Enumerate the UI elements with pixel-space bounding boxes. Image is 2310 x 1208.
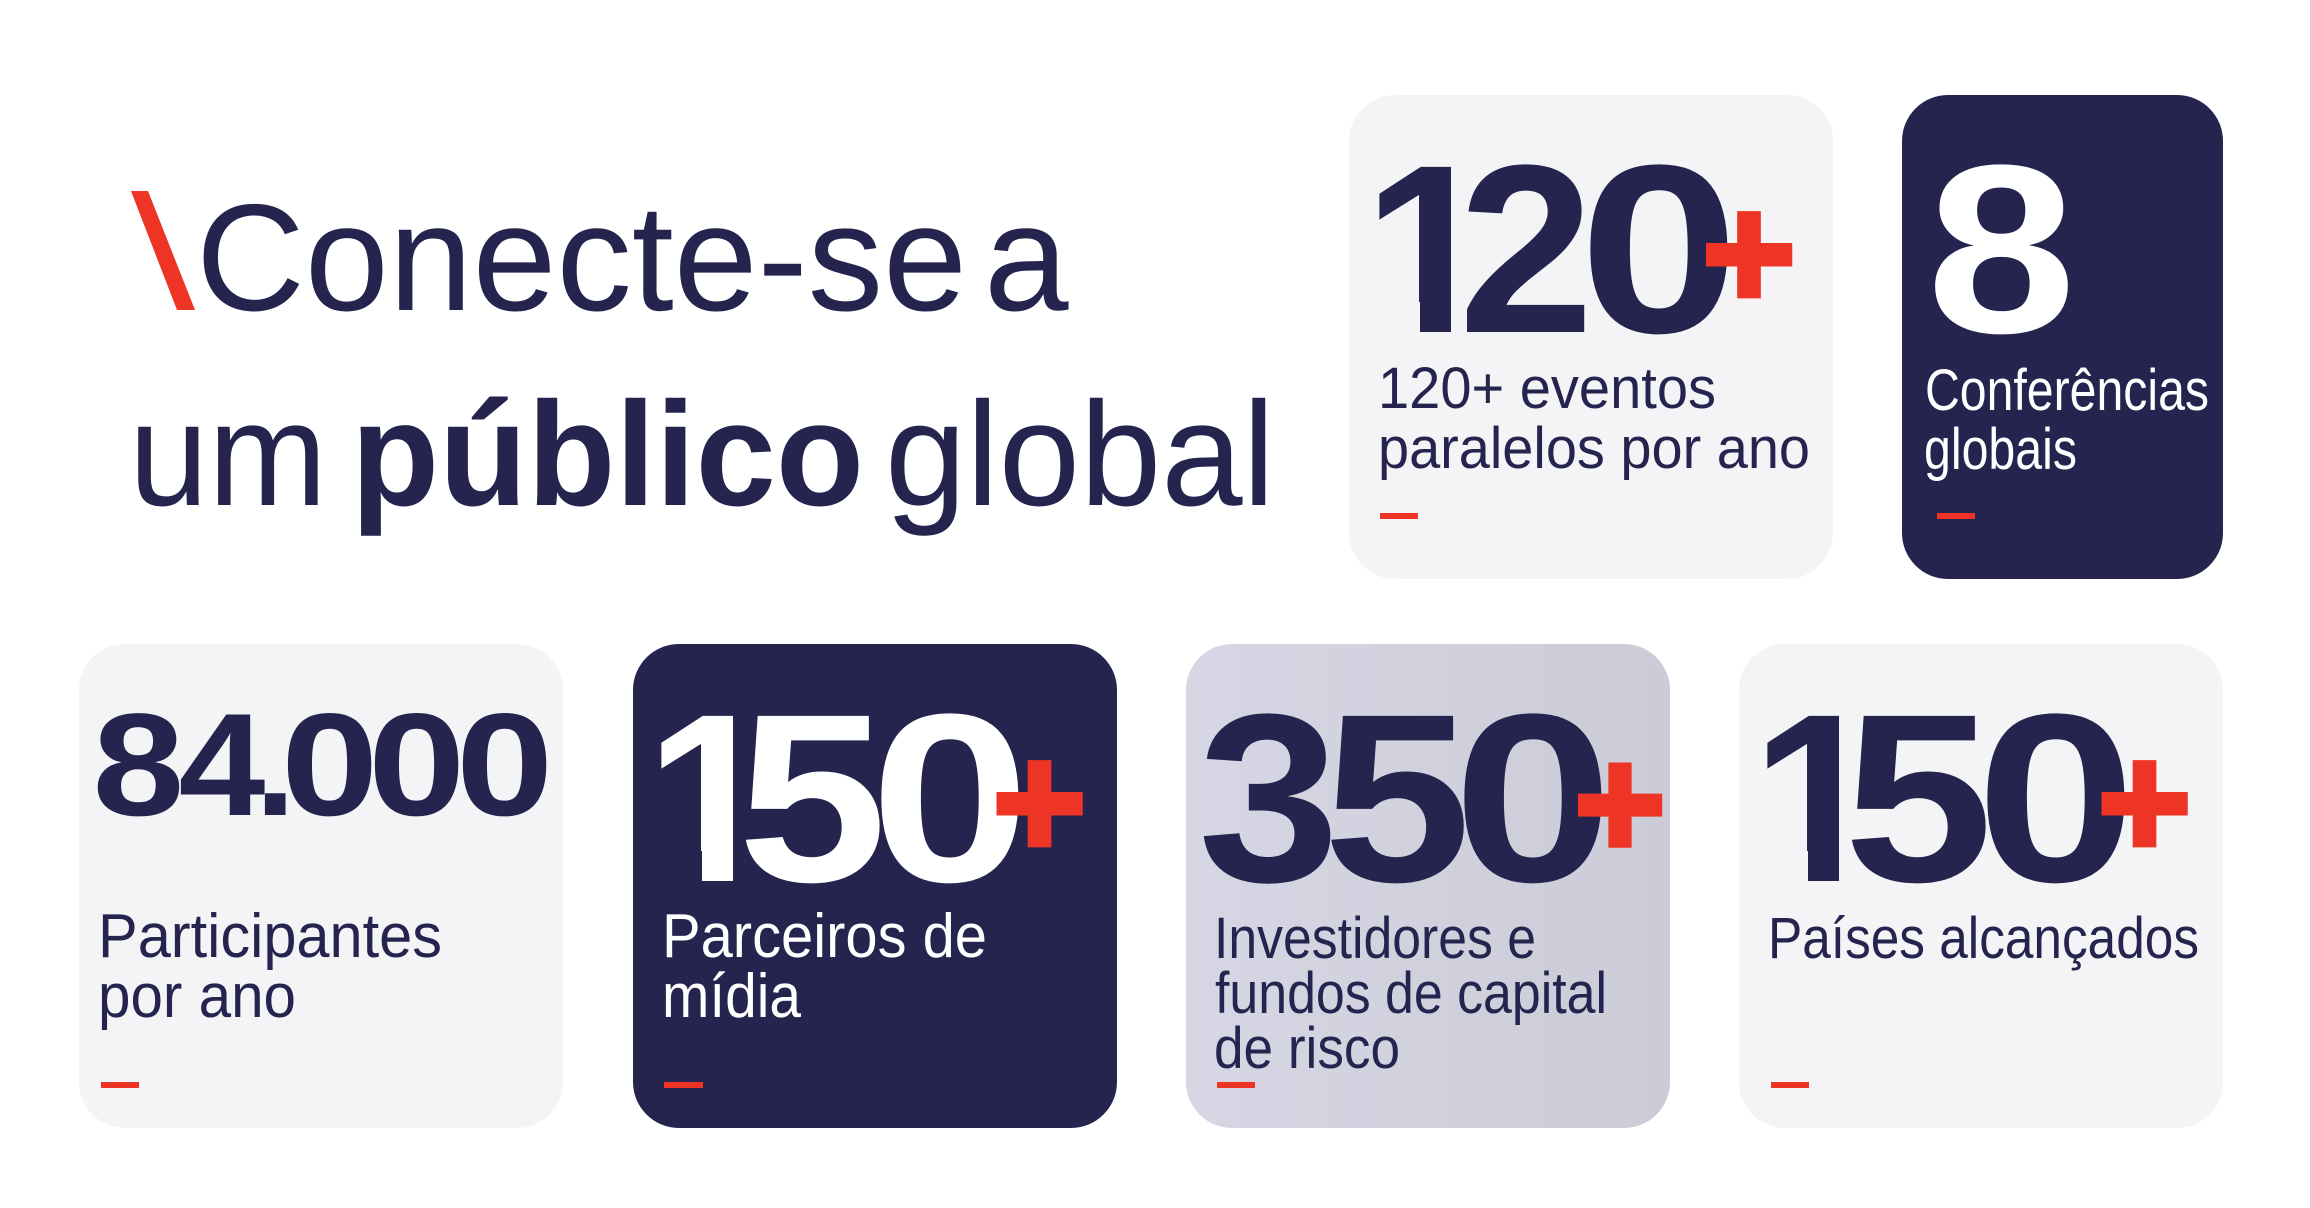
number: 150+: 0 [1976,665,2136,933]
red dash [664,1082,703,1088]
number: 8: 8 [1927,114,2076,383]
label [1378,356,1810,481]
number: 150+: 5 [738,663,887,932]
label: fundos de capital [1215,961,1607,1026]
number: 84.000: 0 [368,684,465,847]
number: 150+: 1 [1751,664,1884,932]
number: 120+: 0 [1579,116,1739,384]
label: por ano [98,962,296,1031]
number: 150+: + [993,712,1086,891]
red dash [1771,1082,1809,1088]
number: 120+ [1379,164,1792,334]
number: 120+: + [1702,163,1796,342]
number: 350+: + [1574,717,1666,891]
number: 350+: 5 [1323,663,1471,932]
number: 84.000: 8 [92,684,184,847]
label [1924,358,2209,482]
red dash [1937,513,1975,519]
panel: 150+ países [1739,644,2223,1128]
panel: 350+ investidores [1186,644,1670,1128]
label: mídia [662,962,801,1031]
title line 2 end: global [885,372,1275,537]
label: 120+ eventos [1378,356,1716,421]
label: Investidores e [1214,906,1536,971]
number: 120+: 1 [1363,115,1496,383]
number: 84.000: 0 [281,684,378,847]
number: 150+: + [2098,712,2191,891]
label: de risco [1214,1016,1400,1081]
panel: 150+ parceiros [633,644,1117,1128]
icon: red backslash [131,191,195,310]
number: 84.000: 0 [456,684,553,847]
label [98,902,442,1031]
number: 350+: 3 [1198,665,1339,932]
red dash [101,1082,139,1088]
label: Países alcançados [1768,906,2199,971]
number: 84.000: 4 [178,684,265,847]
number: 350+ [1198,663,1666,933]
number: 120+: 2 [1459,116,1594,384]
label: paralelos por ano [1378,416,1810,481]
panel: 8 conferências [1902,95,2223,579]
label: Parceiros de [662,902,987,971]
label [662,902,987,1031]
number: 150+: 0 [870,665,1030,933]
number: 150+: 5 [1844,663,1993,932]
title [129,173,1275,537]
title line 1 end: a [984,173,1069,343]
number: 150+ [661,713,1083,884]
red dash [1217,1082,1255,1088]
panel: 84.000 participantes [79,644,563,1128]
number: 150+ [1767,713,2188,884]
title line 1: Conecte-se [196,173,967,343]
label: globais [1924,417,2077,482]
number: 84.000 [92,683,553,847]
red dash [1380,513,1418,519]
label [1214,906,1607,1081]
label: Conferências [1925,358,2209,423]
title bold word: público [351,372,864,537]
number: 350+: 0 [1453,665,1613,933]
label: Participantes [98,902,442,971]
number: 150+: 1 [645,664,778,932]
panel: 120+ eventos [1349,95,1833,579]
number: 84.000: . [255,683,296,846]
title line 2 start: um [129,372,327,537]
